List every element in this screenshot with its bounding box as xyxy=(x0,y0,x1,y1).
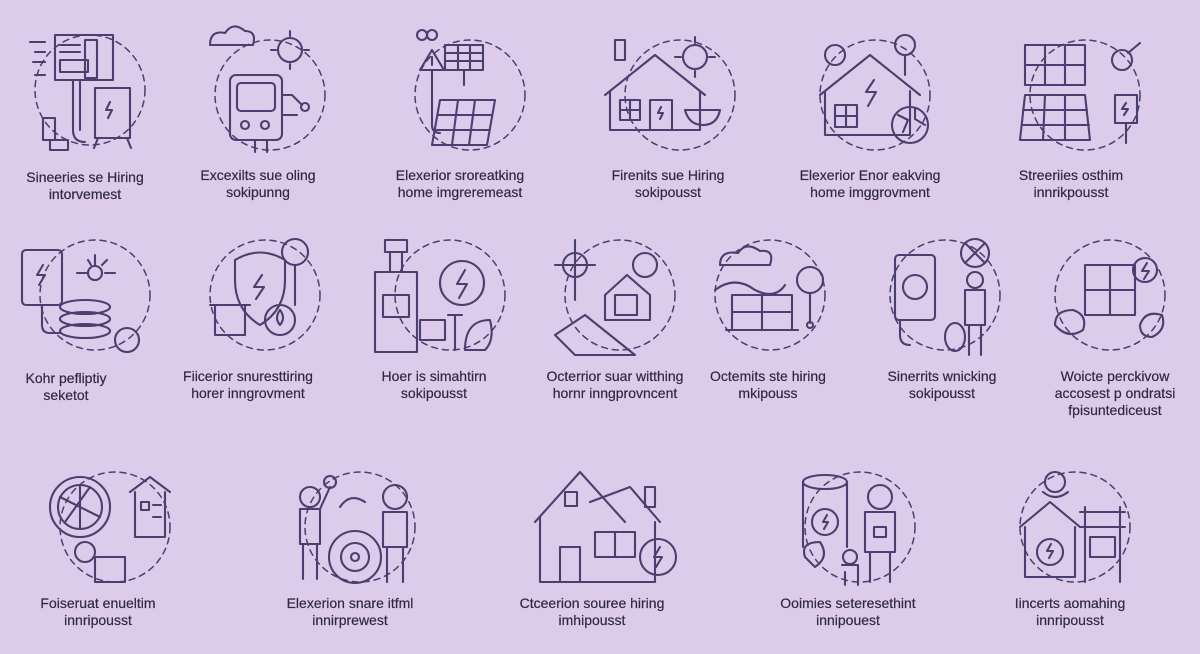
label 18 xyxy=(1015,595,1125,628)
label 14: Foiseruat enueltim xyxy=(40,595,156,611)
label 9: Hoer is simahtirn xyxy=(381,368,487,384)
icon 1: electrical panel xyxy=(30,35,145,150)
icon 9: heater xyxy=(375,240,505,352)
label 17: innipouest xyxy=(816,612,880,628)
icon 13: window with gloves xyxy=(1055,240,1165,350)
label 14 xyxy=(40,595,156,628)
label 5: Elexerior Enor eakving xyxy=(800,167,940,183)
icon 17: battery & people xyxy=(803,472,915,585)
icon 5: house globe xyxy=(820,35,930,150)
label 16: Ctceerion souree hiring xyxy=(520,595,664,611)
icon 15: people with wheel xyxy=(300,472,415,583)
label 2: Excexilts sue oling xyxy=(200,167,316,183)
label 10 xyxy=(547,368,683,401)
label 2: sokipunng xyxy=(226,184,290,200)
label 2 xyxy=(200,167,316,200)
label 8: Fiicerior snuresttiring xyxy=(183,368,313,384)
icon 14: gear globe xyxy=(50,472,170,582)
icon 11: window with clouds xyxy=(715,240,825,350)
label 1 xyxy=(26,169,144,202)
label 3: Elexerior sroreatking xyxy=(396,167,524,183)
label 11: Octemits ste hiring xyxy=(710,368,826,384)
icon 8: shield xyxy=(210,239,320,350)
icon 16: house xyxy=(535,472,676,582)
label 4: sokipousst xyxy=(635,184,701,200)
label 18: Iincerts aomahing xyxy=(1015,595,1125,611)
label 13: Woicte perckivow xyxy=(1061,368,1170,384)
label 4: Firenits sue Hiring xyxy=(612,167,724,183)
label 15: innirprewest xyxy=(312,612,388,628)
label 7 xyxy=(26,370,106,403)
label 10: Octerrior suar witthing xyxy=(547,368,683,384)
label 14: innripousst xyxy=(64,612,132,628)
icon 7: tablet xyxy=(22,240,150,352)
label 5: home imggrovment xyxy=(810,184,930,200)
label 12: sokipousst xyxy=(909,385,975,401)
label 12: Sinerrits wnicking xyxy=(888,368,996,384)
label 4 xyxy=(612,167,724,200)
icon 12: worker xyxy=(890,239,1000,355)
label 11 xyxy=(710,368,826,401)
label 13: accosest p ondratsi xyxy=(1055,385,1175,401)
icon 4: house with sun xyxy=(605,37,735,150)
icon 6: solar panel & sign xyxy=(1020,40,1140,150)
label 6 xyxy=(1019,167,1123,200)
label 3: home imgreremeast xyxy=(398,184,522,200)
icon 2: meter xyxy=(210,26,325,152)
label 9 xyxy=(381,368,487,401)
label 10: hornr inngprovncent xyxy=(553,385,677,401)
label 17 xyxy=(780,595,916,628)
label 6: innrikpousst xyxy=(1034,184,1108,200)
icon 10: house & tools xyxy=(555,240,675,355)
icon 18: house with fence xyxy=(1020,472,1130,582)
label 8 xyxy=(183,368,313,401)
label 16: imhipousst xyxy=(559,612,626,628)
label 11: mkipouss xyxy=(738,385,798,401)
label 15 xyxy=(287,595,413,628)
label 3 xyxy=(396,167,524,200)
label 7: Kohr pefliptiy xyxy=(26,370,106,386)
label 7: seketot xyxy=(43,387,89,403)
label 16 xyxy=(520,595,664,628)
label 18: innripousst xyxy=(1036,612,1104,628)
label 13: fpisuntediceust xyxy=(1068,402,1162,418)
label 13 xyxy=(1055,368,1175,418)
label 12 xyxy=(888,368,996,401)
label 15: Elexerion snare itfml xyxy=(287,595,413,611)
label 5 xyxy=(800,167,940,200)
label 1: intorvemest xyxy=(49,186,121,202)
label 6: Streeriies osthim xyxy=(1019,167,1123,183)
icon 3: solar panels with warning xyxy=(415,30,525,150)
label 9: sokipousst xyxy=(401,385,467,401)
label 1: Sineeries se Hiring xyxy=(26,169,144,185)
label 8: horer inngrovment xyxy=(191,385,305,401)
label 17: Ooimies seteresethint xyxy=(780,595,916,611)
